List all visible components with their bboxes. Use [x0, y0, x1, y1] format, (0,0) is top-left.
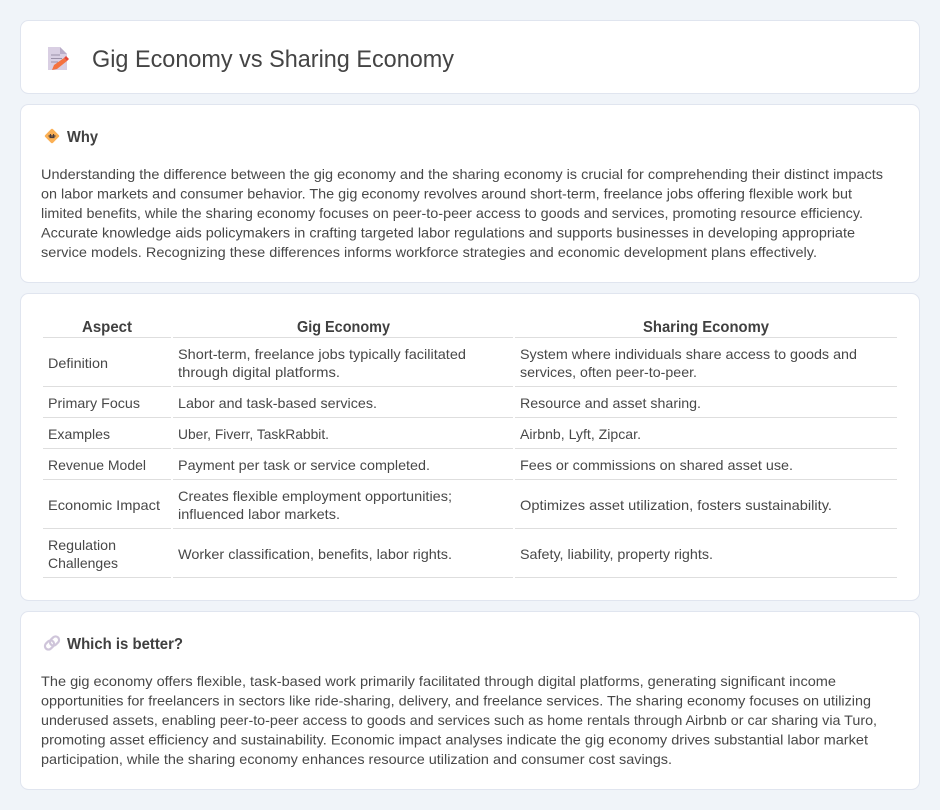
icon: diamond sign: [44, 128, 60, 144]
row: economic impact: influenced labor markets.: [178, 506, 340, 522]
text block: why: on labor markets and consumer behavior. The gig economy revolves around short-term, freelance jobs offering flexible work but: [41, 186, 852, 202]
text block: why: limited benefits, while the sharing economy focuses on peer-to-peer access to goods and services, promoting resource efficiency.: [41, 205, 863, 221]
row: definition: Short-term, freelance jobs typically facilitated: [178, 346, 466, 362]
row: regulation challenges: Challenges: [48, 555, 118, 571]
row: examples: [43, 426, 897, 449]
row: definition: [43, 346, 897, 387]
heading: which is better: Which is better?: [67, 636, 183, 653]
text block: why: [41, 166, 883, 260]
row: definition: Definition: [48, 355, 108, 371]
text block: which is better: underused assets, enabling peer-to-peer access to goods and services such as home rentals through Airbnb or car sharing via Turo,: [41, 712, 877, 728]
row: revenue model: Fees or commissions on shared asset use.: [520, 457, 793, 473]
panel: title: [20, 20, 920, 94]
row: examples: Airbnb, Lyft, Zipcar.: [520, 426, 641, 442]
row: primary focus: Resource and asset sharing.: [520, 395, 701, 411]
row: definition: services, often peer-to-peer.: [520, 364, 697, 380]
row: definition: System where individuals share access to goods and: [520, 346, 857, 362]
panel: why: [20, 104, 920, 282]
table header: [43, 319, 897, 338]
table: [43, 319, 897, 578]
panel: comparison table: [20, 294, 920, 600]
row: economic impact: Economic Impact: [48, 497, 160, 513]
text block: why: service models. Recognizing these differences informs workforce strategies and economic development plans effectively.: [41, 244, 817, 260]
row: examples: Uber, Fiverr, TaskRabbit.: [178, 426, 329, 442]
row: revenue model: [43, 457, 897, 480]
table header: Gig Economy: [297, 319, 390, 336]
row: revenue model: Revenue Model: [48, 457, 146, 473]
icon: link: [43, 635, 61, 651]
row: primary focus: Primary Focus: [48, 395, 140, 411]
row: regulation challenges: Safety, liability, property rights.: [520, 546, 713, 562]
row: examples: Examples: [48, 426, 110, 442]
row: revenue model: Payment per task or service completed.: [178, 457, 430, 473]
row: regulation challenges: Worker classification, benefits, labor rights.: [178, 546, 452, 562]
panel: which is better: [20, 612, 920, 790]
text block: which is better: participation, while the sharing economy enhances resource utilization and consumer cost savings.: [41, 751, 672, 767]
text block: why: Accurate knowledge aids policymakers in crafting targeted labor regulations and supports businesses in developing appropriate: [41, 224, 855, 240]
row: regulation challenges: Regulation: [48, 537, 116, 553]
row: economic impact: Optimizes asset utilization, fosters sustainability.: [520, 497, 832, 513]
text block: which is better: opportunities for freelancers in sectors like ride-sharing, delivery, and freelance services. The sharing economy focuses on utilizing: [41, 692, 871, 708]
table header: Aspect: [82, 319, 133, 336]
row: economic impact: Creates flexible employment opportunities;: [178, 488, 452, 504]
heading: why: Why: [67, 129, 98, 146]
text block: which is better: [41, 673, 877, 767]
row: definition: through digital platforms.: [178, 364, 340, 380]
row: economic impact: [43, 488, 897, 529]
title: Gig Economy vs Sharing Economy: [92, 46, 454, 73]
text block: which is better: The gig economy offers flexible, task-based work primarily facilitated through digital platforms, generating significant income: [41, 673, 836, 689]
table header: Sharing Economy: [643, 319, 769, 336]
text block: why: Understanding the difference between the gig economy and the sharing economy is crucial for comprehending their distinct impacts: [41, 166, 883, 182]
text block: which is better: promoting asset efficiency and sustainability. Economic impact analyses indicate the gig economy drives substantial labor market: [41, 732, 868, 748]
row: primary focus: Labor and task-based services.: [178, 395, 377, 411]
icon: memo with pencil: [48, 47, 69, 70]
row: regulation challenges: [43, 537, 897, 578]
row: primary focus: [43, 395, 897, 418]
